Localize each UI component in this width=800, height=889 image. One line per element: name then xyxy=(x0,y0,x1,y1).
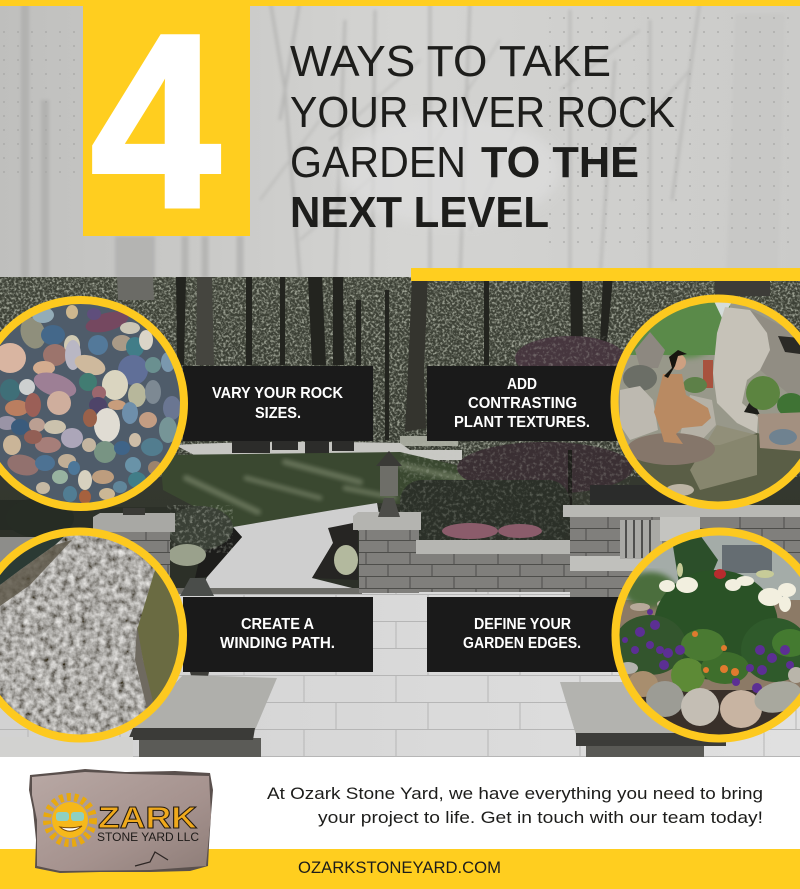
low stone wall xyxy=(416,540,570,592)
center pier and lantern xyxy=(353,451,421,593)
header background: misty forest xyxy=(0,0,800,278)
photo circle: gravel path xyxy=(0,527,200,743)
footer yellow band xyxy=(0,849,800,889)
photo circle: flower bed with round rocks xyxy=(610,527,800,745)
dark maple and shrubs right of pier xyxy=(0,442,710,544)
upper bench wall xyxy=(563,505,800,597)
label: define your garden edges: GARDEN EDGES. xyxy=(463,635,581,652)
call to action text xyxy=(267,784,763,827)
background photo: patio and garden xyxy=(0,277,800,758)
photo circle: colourful river rocks xyxy=(0,296,190,512)
far patio xyxy=(175,441,462,460)
title: TO THE xyxy=(481,138,639,187)
foreground cap left xyxy=(128,675,277,758)
label: vary your rock sizes xyxy=(183,366,373,441)
top yellow stripe xyxy=(0,0,800,6)
logo: Ozark Stone Yard on stone slab: STONE YARD LLC xyxy=(97,830,199,844)
photo circle: woman by pond and rock waterfall xyxy=(600,295,800,515)
call to action text: your project to life. Get in touch with our team today! xyxy=(318,808,763,827)
lawn xyxy=(162,452,467,527)
yellow accent bar xyxy=(411,268,800,281)
title: WAYS TO TAKE xyxy=(290,37,611,86)
label: vary your rock sizes: SIZES. xyxy=(255,405,301,422)
title: YOUR RIVER ROCK xyxy=(290,88,675,137)
walkway xyxy=(200,503,380,592)
logo: Ozark Stone Yard on stone slab xyxy=(29,769,213,873)
yellow number block xyxy=(83,0,250,259)
label: create a winding path xyxy=(183,597,373,672)
footer white band xyxy=(0,757,800,849)
label: add contrasting plant textures: ADD xyxy=(507,376,537,393)
planting beds and shrubs left xyxy=(6,498,358,580)
title: NEXT LEVEL xyxy=(290,188,549,237)
title xyxy=(290,37,675,237)
left pier xyxy=(0,508,175,577)
logo wordmark: ZARK xyxy=(98,800,198,835)
label: add contrasting plant textures: CONTRASTING xyxy=(468,395,577,412)
label: add contrasting plant textures xyxy=(427,366,619,441)
label: add contrasting plant textures: PLANT TEXTURES. xyxy=(454,414,590,431)
label: create a winding path: WINDING PATH. xyxy=(220,635,335,652)
foreground paving xyxy=(0,588,800,757)
title: GARDEN xyxy=(290,138,466,187)
call to action text: At Ozark Stone Yard, we have everything you need to bring xyxy=(267,784,763,803)
label: create a winding path: CREATE A xyxy=(241,616,314,633)
foreground cap right xyxy=(0,682,726,757)
label: define your garden edges: DEFINE YOUR xyxy=(474,616,571,633)
logo sun mascot xyxy=(47,797,93,843)
label: vary your rock sizes: VARY YOUR ROCK xyxy=(212,385,343,402)
lantern on left post xyxy=(180,578,214,676)
website url: OZARKSTONEYARD.COM xyxy=(298,858,501,877)
forest xyxy=(0,277,800,597)
label: define your garden edges xyxy=(427,597,619,672)
